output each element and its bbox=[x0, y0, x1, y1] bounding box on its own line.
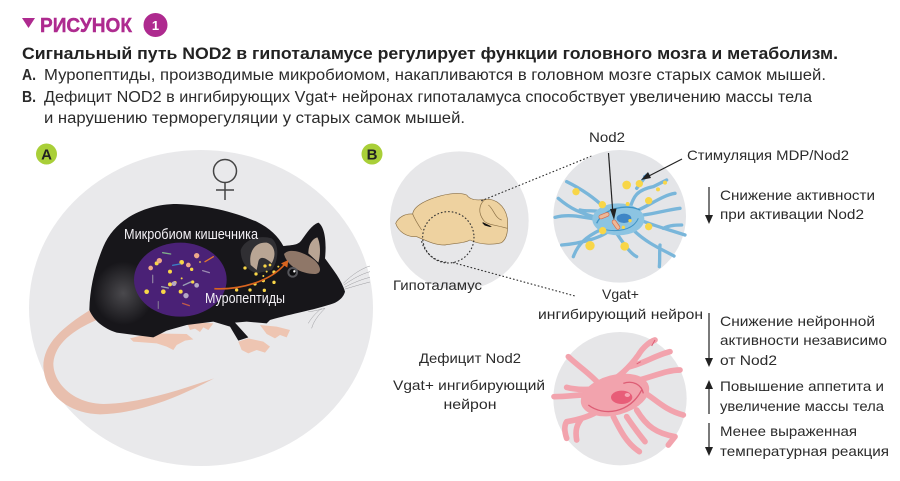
whiskers bbox=[308, 266, 370, 328]
effect: lowered neuronal activity: Снижение нейронной bbox=[720, 313, 875, 329]
description: Муропептиды, производимые микробиомом, накапливаются в головном мозге старых самок мышей. bbox=[44, 67, 826, 84]
effect: thermal response: Менее выраженная bbox=[720, 423, 857, 439]
eye bbox=[287, 267, 298, 278]
effect: lowered activity on activation bbox=[705, 187, 875, 224]
brain bbox=[396, 193, 508, 245]
description: и нарушению терморегуляции у старых самок мышей. bbox=[44, 110, 465, 127]
panel: B brain and neurons bbox=[362, 130, 849, 465]
brain circle and zoom lines bbox=[390, 150, 686, 296]
tail bbox=[43, 310, 214, 414]
label: Vgat+ neuron bbox=[538, 286, 703, 322]
badge A: A bbox=[41, 146, 52, 164]
gut microbiome bbox=[134, 243, 227, 317]
label: Vgat+ neuron: Vgat+ bbox=[602, 286, 639, 302]
label: Nod2 deficiency: Vgat+ ингибирующий bbox=[393, 377, 545, 393]
body bbox=[89, 204, 345, 341]
effect: appetite and weight gain: увеличение массы тела bbox=[720, 398, 884, 414]
label: muropeptides: Муропептиды bbox=[205, 290, 285, 307]
badge B bbox=[362, 144, 382, 164]
muropeptides dots bbox=[235, 264, 279, 292]
effect: lowered neuronal activity: активности независимо bbox=[720, 332, 887, 348]
arrows into neuron bbox=[608, 153, 682, 215]
inner ear bbox=[241, 237, 277, 273]
feet bbox=[130, 322, 213, 350]
description: B. bbox=[22, 89, 36, 106]
mouse illustration bbox=[43, 204, 370, 414]
background ellipse bbox=[29, 150, 373, 466]
effect: thermal response: температурная реакция bbox=[720, 443, 889, 459]
figure heading bbox=[22, 13, 168, 37]
effect: appetite and weight gain: Повышение аппетита и bbox=[720, 378, 884, 394]
effect: lowered neuronal activity: от Nod2 bbox=[720, 352, 777, 368]
label: MDP stimulation: Стимуляция MDP/Nod2 bbox=[687, 147, 849, 163]
description bbox=[22, 67, 826, 127]
label: Nod2 deficiency bbox=[393, 350, 545, 412]
label: hypothalamus: Гипоталамус bbox=[393, 277, 482, 293]
label: Nod2: Nod2 bbox=[589, 130, 625, 145]
figure heading: РИСУНОК bbox=[40, 15, 133, 37]
title: Сигнальный путь NOD2 в гипоталамусе регулирует функции головного мозга и метаболизм. bbox=[22, 44, 838, 63]
effect: lowered activity on activation: при активации Nod2 bbox=[720, 206, 864, 222]
hypothalamus dotted circle bbox=[422, 156, 592, 296]
label: Nod2 deficiency: Дефицит Nod2 bbox=[419, 350, 521, 366]
description: A. bbox=[22, 67, 36, 84]
neuron: pink bbox=[553, 332, 687, 465]
label: Vgat+ neuron: ингибирующий нейрон bbox=[538, 306, 703, 322]
description: Дефицит NOD2 в ингибирующих Vgat+ нейронах гипоталамуса способствует увеличению массы тела bbox=[44, 89, 812, 106]
effect: lowered activity on activation: Снижение активности bbox=[720, 187, 875, 203]
effect: appetite and weight gain bbox=[705, 378, 884, 414]
panel: A mouse bbox=[29, 144, 373, 466]
label: Nod2 deficiency: нейрон bbox=[444, 396, 496, 412]
badge A bbox=[36, 144, 57, 164]
effect: thermal response bbox=[705, 423, 889, 459]
icon: female symbol bbox=[214, 160, 236, 200]
label: gut microbiome: Микробиом кишечника bbox=[124, 226, 259, 243]
badge B: B bbox=[367, 146, 378, 164]
effect: lowered neuronal activity bbox=[705, 313, 887, 368]
figure heading: 1 bbox=[152, 18, 159, 33]
arrow: muropeptides to brain bbox=[214, 260, 288, 289]
neuron: blue bbox=[553, 150, 686, 283]
